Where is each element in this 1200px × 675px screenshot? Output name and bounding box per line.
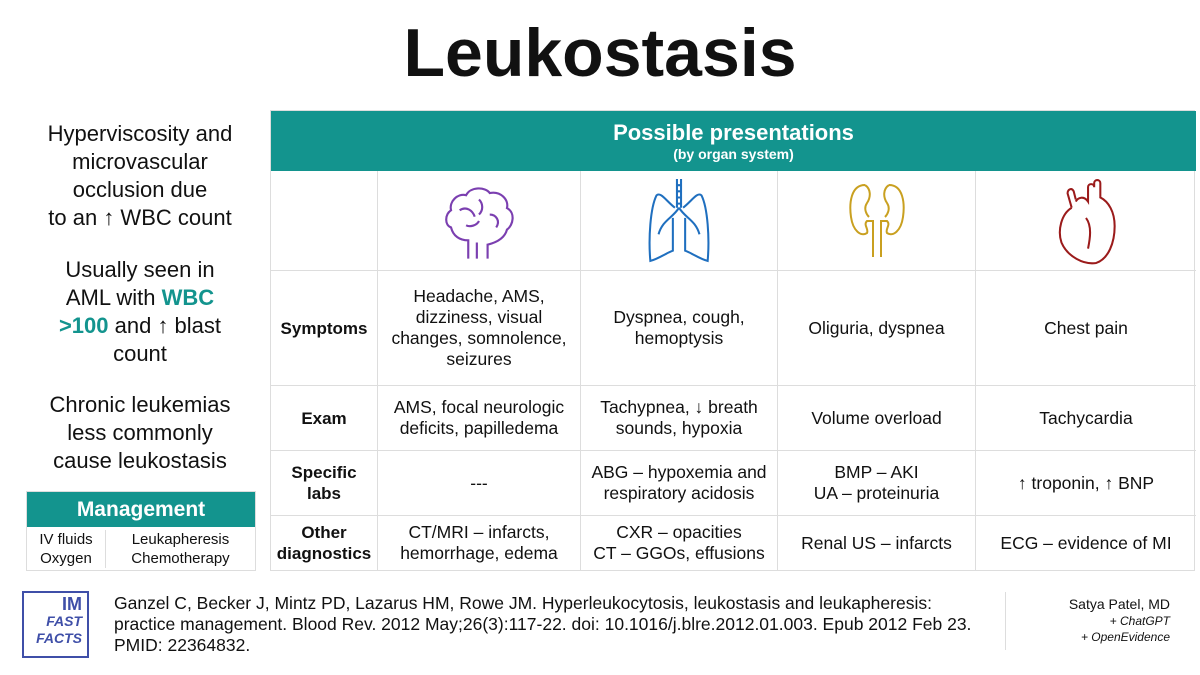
row: other diagnostics: diagnostics (277, 544, 371, 563)
author credit: + ChatGPT (1110, 614, 1170, 628)
management items: IV fluids (39, 531, 93, 548)
panel: presentations table: ABG – hypoxemia and (591, 462, 767, 482)
text block: AML: >100 and ↑ blast (59, 313, 221, 338)
panel: presentations table: AMS, focal neurologic (394, 397, 564, 417)
panel: presentations table: ↑ troponin, ↑ BNP (1018, 472, 1154, 492)
panel: presentations table (270, 110, 1195, 571)
row: labs (271, 451, 378, 516)
row: exam: Exam (301, 408, 347, 428)
author credit (1069, 596, 1171, 644)
logo: IM Fast Facts: FACTS (36, 630, 82, 646)
management items (39, 530, 230, 568)
panel: presentations table: CT – GGOs, effusions (593, 543, 765, 563)
management items: Chemotherapy (131, 550, 230, 567)
panel: presentations table: Renal US – infarcts (801, 532, 952, 552)
text block: definition: microvascular (72, 149, 208, 174)
management header (27, 492, 255, 527)
text block: AML: AML with WBC (66, 285, 214, 310)
logo: IM Fast Facts (22, 591, 89, 658)
row: exam (271, 386, 378, 451)
text block: definition: Hyperviscosity and (48, 121, 232, 146)
panel: presentations table: sounds, hypoxia (616, 418, 742, 438)
table header (271, 111, 1196, 171)
icon: lungs (581, 171, 778, 271)
icon: heart (976, 171, 1196, 271)
row: symptoms (271, 271, 378, 386)
panel: presentations table: Tachypnea, ↓ breath (600, 397, 758, 417)
row: other diagnostics (271, 516, 378, 570)
panel: presentations table: Chest pain (1044, 318, 1128, 338)
panel: presentations table: UA – proteinuria (814, 483, 939, 503)
row: labs: labs (307, 484, 341, 503)
text block: AML (59, 257, 221, 366)
panel: presentations table: BMP – AKI (834, 462, 919, 482)
panel: presentations table: respiratory acidosis (604, 483, 754, 503)
panel: presentations table: changes, somnolence, (391, 328, 567, 348)
text block: AML: Usually seen in (65, 257, 215, 282)
management header: Management (77, 498, 205, 520)
author credit: + OpenEvidence (1081, 630, 1170, 644)
panel: presentations table: CXR – opacities (616, 522, 742, 542)
panel: presentations table: Oliguria, dyspnea (808, 318, 945, 338)
panel: presentations table: Tachycardia (1039, 408, 1133, 428)
panel: presentations table: hemoptysis (635, 328, 723, 348)
citation: Ganzel C, Becker J, Mintz PD, Lazarus HM, Rowe JM. Hyperleukocytosis, leukostasis and leukapheresis: practice management. Blood Rev. 2012 May;26(3):117-22. doi: 10.1016/j.blre.2012.01.003. Epub 2012 Feb 23. PMID: 22364832. (114, 593, 971, 655)
panel: presentations table: ECG – evidence of MI (1000, 532, 1172, 552)
table header: (by organ system) (673, 146, 794, 162)
panel: presentations table: deficits, papilledema (400, 418, 558, 438)
row: other diagnostics: Other (301, 523, 347, 542)
panel: presentations table: hemorrhage, edema (400, 543, 558, 563)
table header: Possible presentations (613, 120, 854, 145)
panel: presentations table: CT/MRI – infarcts, (408, 522, 549, 542)
logo: IM Fast Facts: FAST (46, 613, 82, 629)
icon: kidneys (778, 171, 976, 271)
text block: AML: count (113, 341, 167, 366)
icon: brain (378, 171, 581, 271)
text block: chronic: less commonly (67, 420, 213, 445)
text block: definition: occlusion due (73, 177, 207, 202)
text block: chronic: cause leukostasis (53, 448, 227, 473)
panel: presentations table: dizziness, visual (416, 307, 542, 327)
row: labs: Specific (291, 463, 357, 482)
panel: presentations table: seizures (446, 349, 512, 369)
panel: presentations table: Volume overload (811, 408, 942, 428)
logo: IM Fast Facts: IM (62, 594, 82, 614)
management items: Oxygen (40, 550, 92, 567)
panel: management (26, 491, 256, 571)
text block: chronic: Chronic leukemias (50, 392, 230, 417)
panel: presentations table: --- (470, 472, 488, 492)
text block: definition: to an ↑ WBC count (48, 205, 232, 230)
row: symptoms: Symptoms (281, 318, 367, 338)
panel: presentations table: Dyspnea, cough, (613, 307, 745, 327)
management items: Leukapheresis (132, 531, 229, 548)
panel: presentations table: Headache, AMS, (413, 286, 545, 306)
text block: chronic (50, 392, 230, 473)
title: Leukostasis (403, 15, 797, 91)
text block: definition (48, 121, 232, 230)
author credit: Satya Patel, MD (1069, 596, 1170, 612)
